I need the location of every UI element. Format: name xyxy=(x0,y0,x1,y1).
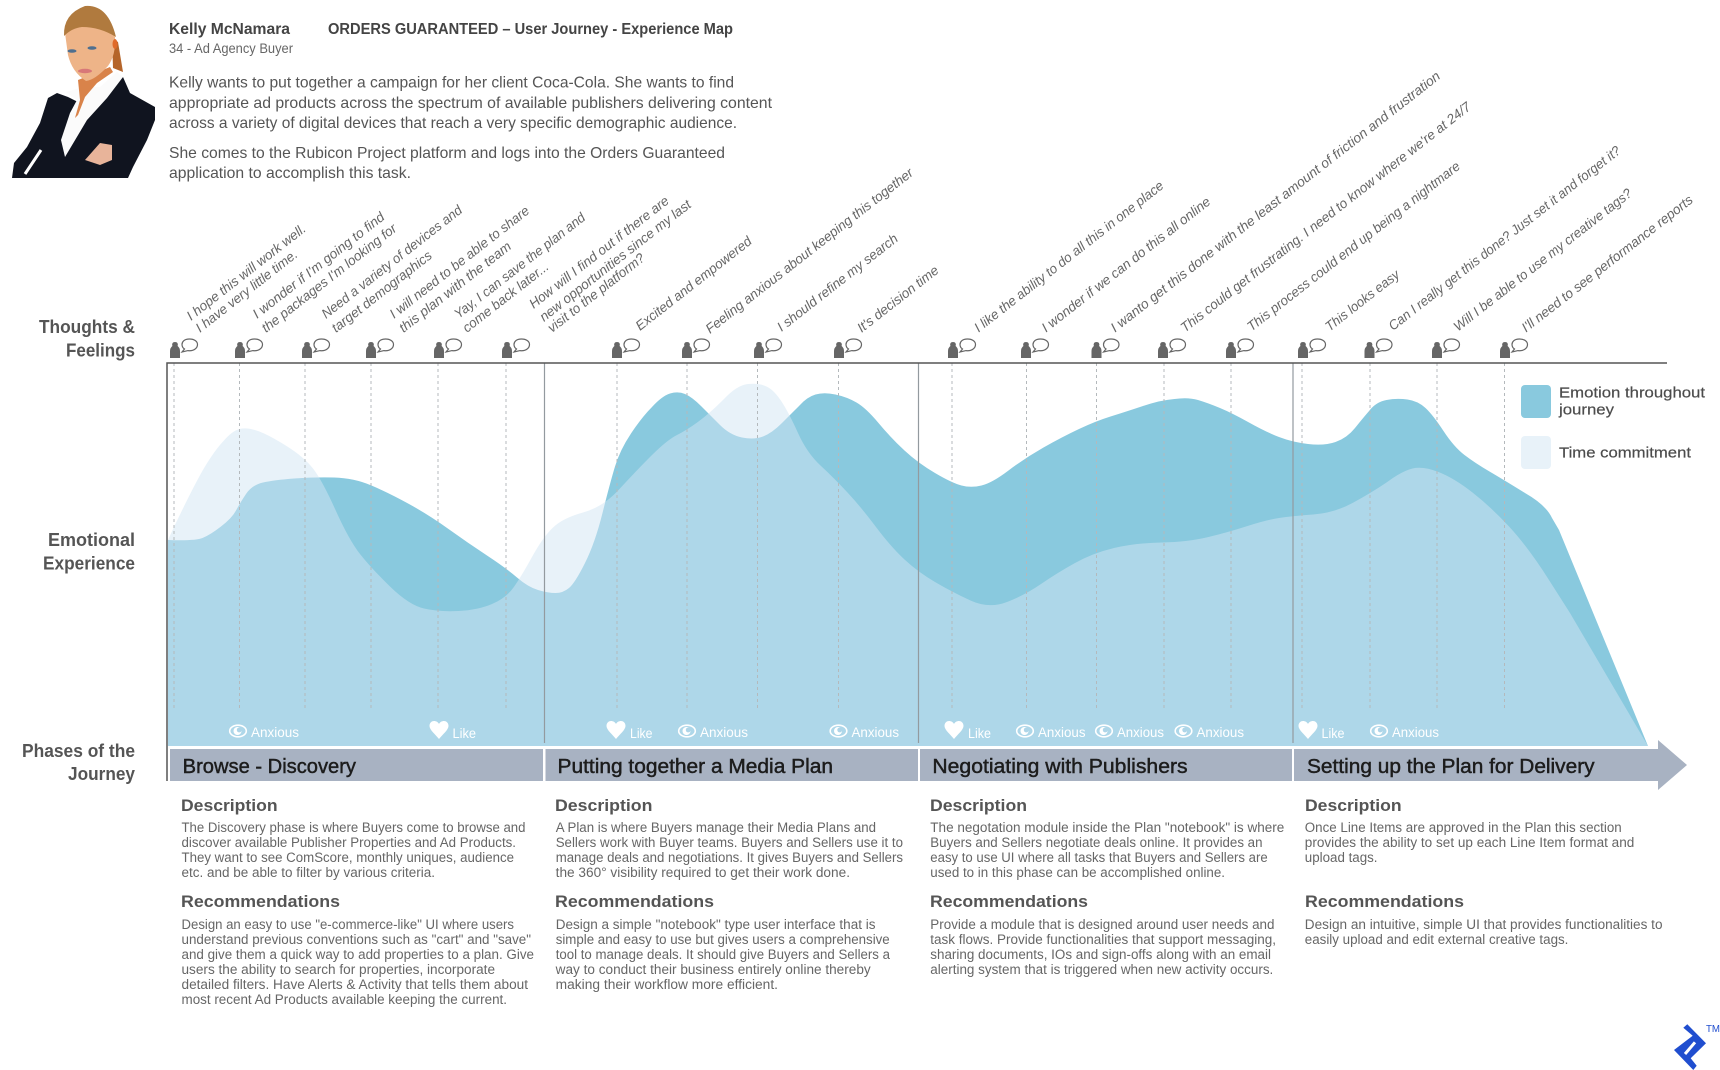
recommendations text xyxy=(930,917,1276,977)
marker: anxious: Anxious xyxy=(1196,725,1244,740)
thought 6: How will I find out if there are xyxy=(526,193,672,311)
panel: Negotiating details xyxy=(930,796,1284,977)
row label: Thoughts & Feelings xyxy=(39,317,135,360)
phase 3: Negotiating with Publishers xyxy=(932,756,1188,778)
marker: anxious: Anxious xyxy=(251,725,299,740)
thought 13: I wanto get this done with the least amount of friction and frustration xyxy=(1108,68,1443,335)
row label: Phases of the Journey xyxy=(22,741,135,784)
description text xyxy=(182,820,526,880)
recommendations text: most recent Ad Products available keeping the current. xyxy=(182,992,507,1007)
phase 4 with arrow head: Setting up the Plan for Delivery xyxy=(1307,756,1595,778)
description text: The Discovery phase is where Buyers come to browse and xyxy=(182,820,526,835)
legend label: time: Time commitment xyxy=(1559,444,1692,462)
thought 5: come back later... xyxy=(460,259,552,335)
legend swatch: time xyxy=(1521,436,1551,469)
marker: like: Like xyxy=(968,726,991,741)
persona description: application to accomplish this task. xyxy=(169,165,411,182)
marker: anxious: Anxious xyxy=(1038,725,1086,740)
thought 4: this plan with the team xyxy=(396,239,514,335)
thought 4: I will need to be able to share xyxy=(387,203,532,321)
marker: like: Like xyxy=(1322,726,1344,741)
row label: Emotional Experience: Experience xyxy=(43,554,135,574)
heading: description: Description xyxy=(1305,796,1402,815)
thought 16: This looks easy xyxy=(1322,266,1403,334)
legend xyxy=(1521,384,1706,469)
heading: recommendations: Recommendations xyxy=(181,892,340,911)
description text xyxy=(930,820,1284,880)
heading: recommendations: Recommendations xyxy=(930,892,1088,911)
description text: Once Line Items are approved in the Plan this section xyxy=(1305,820,1622,835)
marker: anxious: Anxious xyxy=(852,725,899,740)
persona description: across a variety of digital devices that reach a very specific demographic audience. xyxy=(169,115,737,132)
description text: provides the ability to set up each Line Item format and xyxy=(1305,835,1634,850)
thought 1: I have very little time. xyxy=(193,247,300,335)
recommendations text: Design an easy to use "e-commerce-like" UI where users xyxy=(182,917,514,932)
thought 14: This could get frustrating. I need to know where we're at 24/7 xyxy=(1178,99,1474,335)
chart: emotional experience area chart xyxy=(167,363,1667,781)
phase 2: Putting together a Media Plan xyxy=(558,756,833,778)
heading: recommendations: Recommendations xyxy=(1305,892,1464,911)
portrait: Kelly McNamara xyxy=(12,6,155,178)
marker: like xyxy=(944,721,991,741)
phase 4 with arrow head xyxy=(1294,740,1687,790)
thought 3: Need a variety of devices and xyxy=(319,202,465,321)
phase bar: arrow with four phases xyxy=(170,740,1687,790)
recommendations text: Design a simple "notebook" type user interface that is xyxy=(556,917,876,932)
header text xyxy=(169,21,773,182)
map title: ORDERS GUARANTEED – User Journey - Experience Map xyxy=(328,21,733,38)
heading: description: Description xyxy=(181,796,278,815)
marker: anxious xyxy=(1175,725,1244,740)
marker: anxious xyxy=(1371,725,1439,740)
row label: Emotional Experience xyxy=(43,530,135,574)
persona description: She comes to the Rubicon Project platform and logs into the Orders Guaranteed xyxy=(169,145,725,162)
description text: They want to see ComScore, monthly uniques, audience xyxy=(182,850,514,865)
row label: Thoughts & Feelings: Thoughts & xyxy=(39,317,135,337)
phase 1 xyxy=(170,749,543,781)
description text: discover available Publisher Properties and Ad Products. xyxy=(182,835,516,850)
heading: description: Description xyxy=(555,796,652,815)
description text: Sellers work with Buyer teams. Buyers and Sellers use it to xyxy=(556,835,903,850)
marker: like xyxy=(606,721,652,741)
recommendations text: understand previous conventions such as "cart" and "save" xyxy=(182,932,531,947)
thought 6: visit to the platform? xyxy=(545,250,648,335)
chart markers: feelings along journey xyxy=(230,721,1439,741)
thought 7: Excited and empowered xyxy=(633,233,755,333)
description text xyxy=(556,820,903,880)
description text: upload tags. xyxy=(1305,850,1378,865)
legend label: emotion: journey xyxy=(1558,402,1615,418)
phase 1: Browse - Discovery xyxy=(183,756,356,778)
marker: like xyxy=(1298,721,1344,741)
recommendations text: Provide a module that is designed around user needs and xyxy=(930,917,1274,932)
marker: anxious xyxy=(830,725,899,740)
marker: like xyxy=(430,721,476,741)
thought 9: I should refine my search xyxy=(774,231,901,334)
thought 18: Will I be able to use my creative tags? xyxy=(1451,185,1635,334)
row label: Phases of the Journey: Journey xyxy=(68,764,135,784)
recommendations text: and give them a quick way to add properties to a plan. Give xyxy=(182,947,534,962)
persona description: appropriate ad products across the spectrum of available publishers delivering content xyxy=(169,95,773,112)
recommendations text: detailed filters. Have Alerts & Activity that tells them about xyxy=(182,977,528,992)
recommendations text: way to conduct their business entirely online thereby xyxy=(555,962,871,977)
description text: A Plan is where Buyers manage their Media Plans and xyxy=(556,820,876,835)
thought 17: Can I really get this done? Just set it and forget it? xyxy=(1386,143,1624,333)
legend label: emotion: Emotion throughout xyxy=(1559,384,1706,402)
recommendations text: Design an intuitive, simple UI that provides functionalities to xyxy=(1305,917,1663,932)
heading: recommendations: Recommendations xyxy=(555,892,714,911)
thought 19: I'll need to see performance reports xyxy=(1519,192,1696,335)
thought 1: I hope this will work well. xyxy=(184,221,309,323)
legend label: emotion xyxy=(1558,384,1706,418)
recommendations text xyxy=(182,917,534,1007)
marker: like: Like xyxy=(452,726,476,741)
thought 10: It's decision time xyxy=(854,263,941,335)
recommendations text: easily upload and edit external creative tags. xyxy=(1305,932,1568,947)
thought 3: target demographics xyxy=(329,248,435,335)
thought 11: I like the ability to do all this in one place xyxy=(971,178,1166,335)
recommendations text: sharing documents, IOs and sign-offs along with an email xyxy=(930,947,1271,962)
thought 2: the packages I'm looking for xyxy=(259,220,400,335)
recommendations text xyxy=(1305,917,1663,947)
marker: anxious: Anxious xyxy=(1117,725,1164,740)
description text: the 360° visibility required to get their work done. xyxy=(556,865,850,880)
recommendations text xyxy=(555,917,890,992)
description text xyxy=(1305,820,1634,865)
thought 2: I wonder if I'm going to find xyxy=(250,209,388,321)
thought 5: Yay, I can save the plan and xyxy=(451,210,588,321)
persona name: Kelly McNamara xyxy=(169,21,290,38)
row label: Emotional Experience: Emotional xyxy=(48,530,135,550)
area: time commitment xyxy=(168,384,1648,746)
recommendations text: making their workflow more efficient. xyxy=(556,977,778,992)
heading: description: Description xyxy=(930,796,1027,815)
description text: easy to use UI where all tasks that Buyers and Sellers are xyxy=(930,850,1268,865)
recommendations text: alerting system that is triggered when new activity occurs. xyxy=(930,962,1273,977)
row label: Phases of the Journey: Phases of the xyxy=(22,741,135,761)
recommendations text: task flows. Provide functionalities that support messaging, xyxy=(930,932,1276,947)
persona description: Kelly wants to put together a campaign for her client Coca-Cola. She wants to find xyxy=(169,74,734,92)
logo: Toptal xyxy=(1674,1024,1720,1070)
marker: anxious xyxy=(679,725,748,740)
recommendations text: users the ability to search for properties, incorporate xyxy=(182,962,495,977)
thought 6: new opportunities since my last xyxy=(537,196,695,324)
description text: The negotation module inside the Plan "notebook" is where xyxy=(930,820,1284,835)
thought 12: I wonder if we can do this all online xyxy=(1039,194,1213,335)
persona description xyxy=(169,74,773,182)
description text: manage deals and negotiations. It gives Buyers and Sellers xyxy=(556,850,903,865)
description text: Buyers and Sellers negotiate deals online. It provides an xyxy=(930,835,1262,850)
description text: etc. and be able to filter by various criteria. xyxy=(182,865,435,880)
icons: person with speech bubble xyxy=(170,339,1528,358)
thought 15: This process could end up being a nightmare xyxy=(1244,158,1463,334)
row label: Thoughts & Feelings: Feelings xyxy=(66,340,135,360)
description text: used to in this phase can be accomplished online. xyxy=(930,865,1225,880)
marker: anxious: Anxious xyxy=(700,725,748,740)
marker: anxious: Anxious xyxy=(1392,725,1439,740)
marker: like: Like xyxy=(630,726,652,741)
marker: anxious xyxy=(1096,725,1164,740)
panel: Delivery details xyxy=(1305,796,1663,947)
phase 2 xyxy=(546,749,918,781)
panel: Media Plan details xyxy=(555,796,903,992)
legend swatch: emotion xyxy=(1521,385,1551,418)
thought 8: Feeling anxious about keeping this together xyxy=(703,165,916,336)
rotated thoughts xyxy=(184,68,1696,336)
panel: Browse - Discovery details xyxy=(181,796,534,1007)
recommendations text: tool to manage deals. It should give Buyers and Sellers a xyxy=(556,947,890,962)
recommendations text: simple and easy to use but gives users a comprehensive xyxy=(556,932,890,947)
phase 3 xyxy=(920,749,1292,781)
marker: anxious xyxy=(1017,725,1086,740)
marker: anxious xyxy=(230,725,299,740)
persona role: 34 - Ad Agency Buyer xyxy=(169,40,293,56)
area: emotion throughout journey xyxy=(168,392,1648,746)
